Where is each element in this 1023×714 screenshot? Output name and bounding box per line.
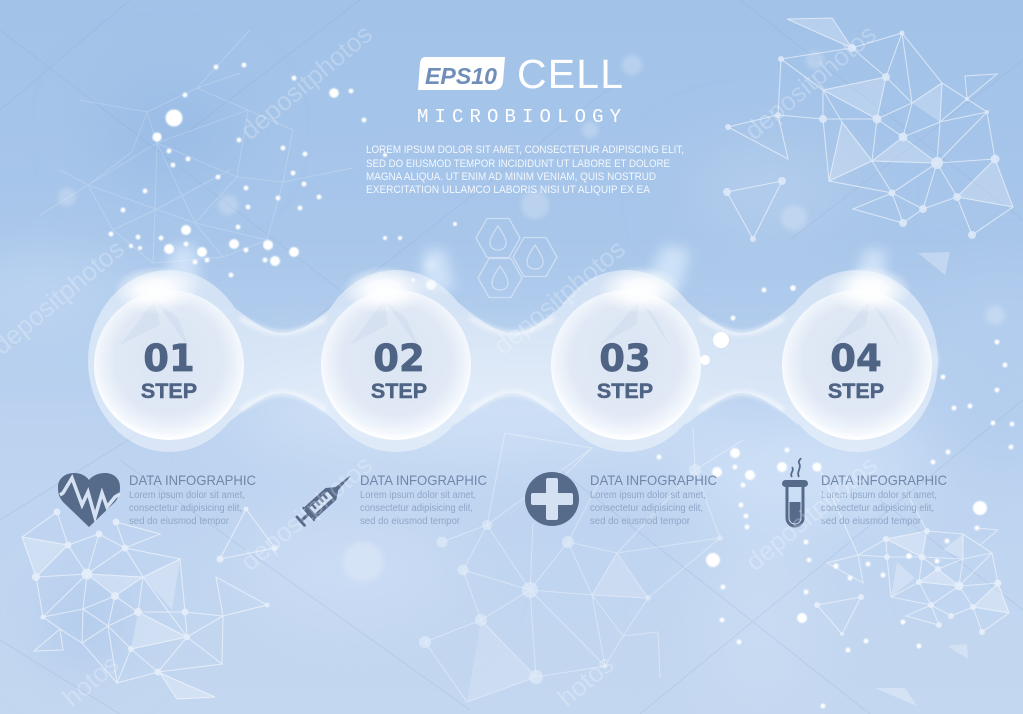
network mesh: lower right — [814, 252, 1009, 706]
icon: heart with pulse — [58, 473, 120, 527]
bubble chain: outer shells with connectors — [88, 270, 938, 452]
text: info 4: Lorem ipsum dolor sit amet, — [821, 490, 937, 501]
text: info 1: DATA INFOGRAPHIC — [129, 472, 256, 488]
glow streaks above the bubbles — [160, 245, 885, 290]
step 2 label — [371, 337, 427, 403]
step 2 label: STEP — [371, 379, 427, 403]
text: info 3 — [590, 472, 717, 527]
intro text block: MAGNA ALIQUA. UT ENIM AD MINIM VENIAM, QUIS NOSTRUD — [366, 171, 656, 183]
step 3 label: STEP — [597, 379, 653, 403]
intro text block — [366, 144, 684, 196]
icon: hexagon water drops — [476, 218, 557, 298]
icon: test tube — [782, 458, 808, 526]
step 4 label: 04 — [830, 337, 882, 380]
step 2 bubble — [321, 266, 471, 440]
title — [417, 51, 623, 128]
EPS10 badge: EPS10 — [425, 63, 497, 89]
text: info 1 — [129, 472, 256, 527]
text: info 2: consectetur adipisicing elit, — [360, 503, 473, 514]
step 4 bubble — [782, 266, 932, 440]
text: info 2: Lorem ipsum dolor sit amet, — [360, 490, 476, 501]
bokeh soft spots — [58, 51, 1005, 582]
step 1 label — [141, 337, 197, 403]
watermarks: depositphotos — [235, 450, 378, 577]
heading: cell: CELL — [517, 51, 623, 97]
text: info 3: DATA INFOGRAPHIC — [590, 472, 717, 488]
text: info 4: consectetur adipisicing elit, — [821, 503, 934, 514]
step 3 bubble — [551, 266, 701, 440]
text: info 4: sed do eiusmod tempor — [821, 516, 922, 527]
step 1 bubble — [94, 266, 244, 440]
text: info 2 — [360, 472, 487, 527]
text: info 2: DATA INFOGRAPHIC — [360, 472, 487, 488]
watermarks: depositphotos — [235, 19, 378, 146]
text: info 2: sed do eiusmod tempor — [360, 516, 461, 527]
text: info 3: Lorem ipsum dolor sit amet, — [590, 490, 706, 501]
step 1 label: STEP — [141, 379, 197, 403]
intro text block: SED DO EIUSMOD TEMPOR INCIDIDUNT UT LABORE ET DOLORE — [366, 158, 670, 170]
text: info 1: consectetur adipisicing elit, — [129, 503, 242, 514]
watermarks: depositphotos — [488, 234, 631, 361]
text: info 4 — [821, 472, 947, 527]
EPS10 badge — [418, 57, 505, 90]
step 4 label — [828, 337, 884, 403]
watermarks: hotos — [57, 649, 125, 713]
text: info 3: sed do eiusmod tempor — [590, 516, 691, 527]
text: info 3: consectetur adipisicing elit, — [590, 503, 703, 514]
step 4 label: STEP — [828, 379, 884, 403]
step 2 label: 02 — [373, 337, 425, 380]
step 3 label — [597, 337, 653, 403]
heading: microbiology: MICROBIOLOGY — [417, 106, 622, 128]
network mesh: lower left — [22, 506, 278, 699]
watermarks: depositphotos — [739, 19, 882, 146]
step 1 label: 01 — [143, 337, 195, 380]
text: info 4: DATA INFOGRAPHIC — [821, 472, 947, 488]
intro text block: LOREM IPSUM DOLOR SIT AMET, CONSECTETUR ADIPISCING ELIT, — [366, 144, 684, 156]
network mesh: upper left — [40, 30, 353, 263]
network mesh: lower centre — [419, 427, 743, 702]
text: info 1: sed do eiusmod tempor — [129, 516, 230, 527]
icon: medical cross — [525, 472, 579, 526]
watermarks: hotos — [552, 649, 620, 713]
intro text block: EXERCITATION ULLAMCO LABORIS NISI UT ALIQUIP EX EA — [366, 184, 651, 196]
text: info 1: Lorem ipsum dolor sit amet, — [129, 490, 245, 501]
step 3 label: 03 — [599, 337, 651, 380]
icon: syringe — [294, 470, 356, 529]
network mesh: upper right — [723, 18, 1013, 242]
watermarks: depositphotos — [740, 450, 883, 577]
